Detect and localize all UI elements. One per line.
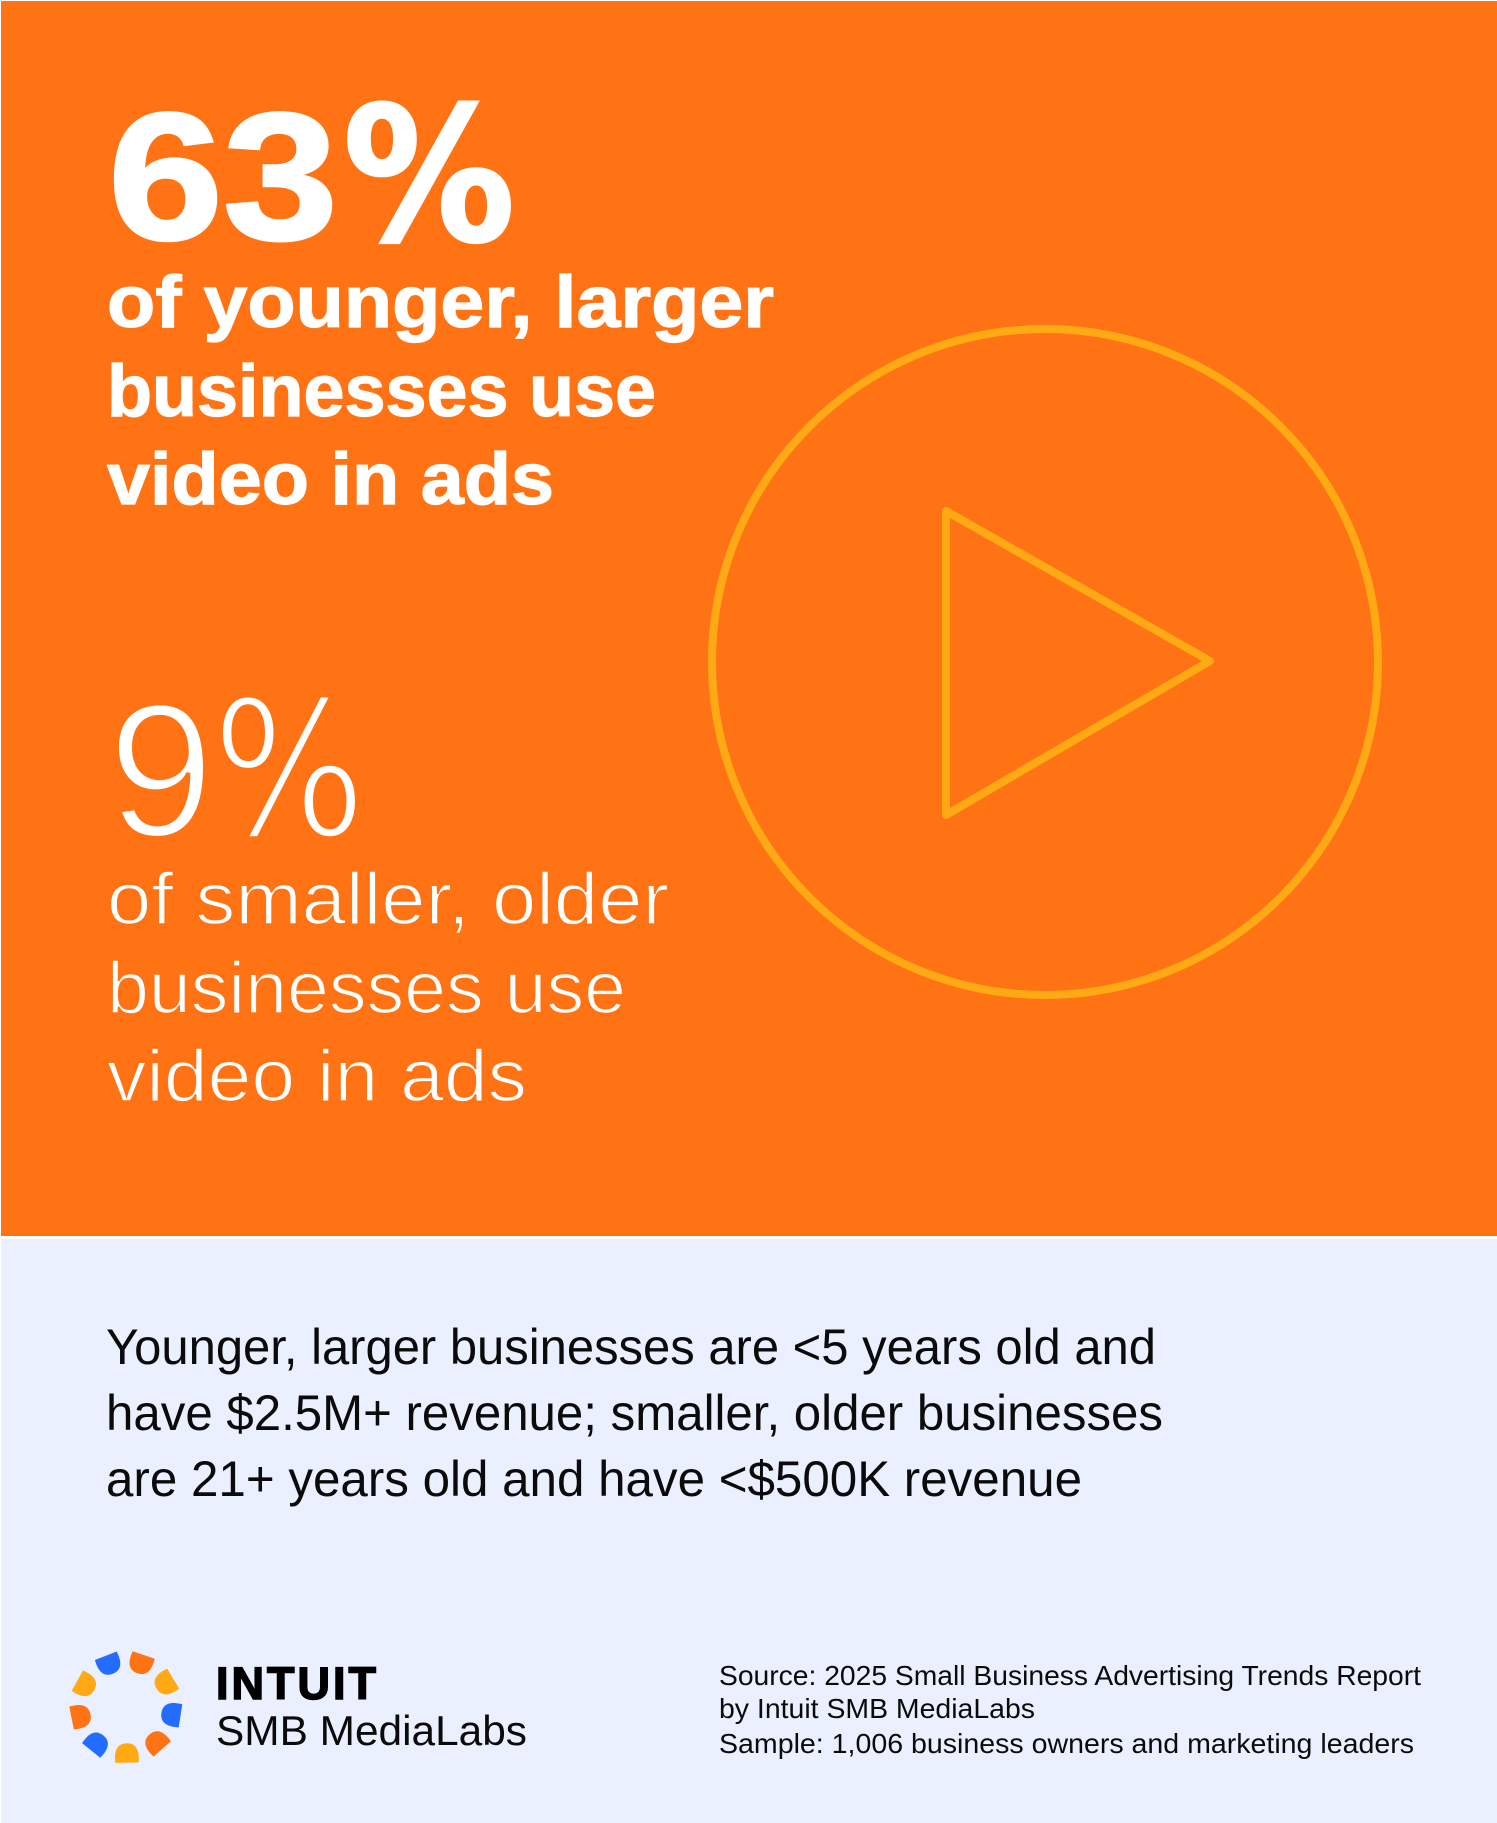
text block: smaller, older businesses: video in ads	[107, 1036, 527, 1117]
icon: Intuit SMB MediaLabs ring logo	[69, 1651, 182, 1763]
text block: younger, larger businesses: video in ads	[107, 439, 554, 520]
statistic: 63 percent: 63	[108, 76, 338, 278]
statistic: 9 percent: %	[212, 660, 366, 881]
text block: business definitions: have $2.5M+ revenue; smaller, older businesses	[106, 1385, 1163, 1441]
statistic: 9 percent: 9	[108, 665, 214, 877]
text block: smaller, older businesses: of smaller, older	[107, 859, 669, 940]
text block: business definitions: are 21+ years old and have <$500K revenue	[106, 1451, 1082, 1507]
logo wordmark: INTUIT: INTUIT	[216, 1658, 376, 1709]
statistic: 63 percent	[108, 67, 515, 284]
panel: light footer background	[1, 1239, 1497, 1823]
text block: business definitions	[106, 1319, 1163, 1507]
statistic: 9 percent	[108, 660, 366, 881]
source note	[719, 1660, 1421, 1759]
text block: younger, larger businesses: businesses use	[107, 351, 656, 432]
text block: smaller, older businesses: businesses use	[107, 948, 626, 1029]
statistic: 63 percent: %	[343, 67, 515, 284]
text block: business definitions: Younger, larger businesses are <5 years old and	[106, 1319, 1156, 1375]
icon: play button	[712, 329, 1378, 995]
source note: Source: 2025 Small Business Advertising Trends Report	[719, 1660, 1421, 1691]
panel: orange statistics background	[1, 1, 1497, 1236]
text block: younger, larger businesses: of younger, larger	[107, 262, 774, 343]
source note: Sample: 1,006 business owners and marketing leaders	[719, 1728, 1414, 1759]
text block: smaller, older businesses	[107, 859, 669, 1117]
logo wordmark: SMB MediaLabs: SMB MediaLabs	[216, 1707, 527, 1754]
text block: younger, larger businesses	[107, 262, 774, 520]
source note: by Intuit SMB MediaLabs	[719, 1693, 1035, 1724]
